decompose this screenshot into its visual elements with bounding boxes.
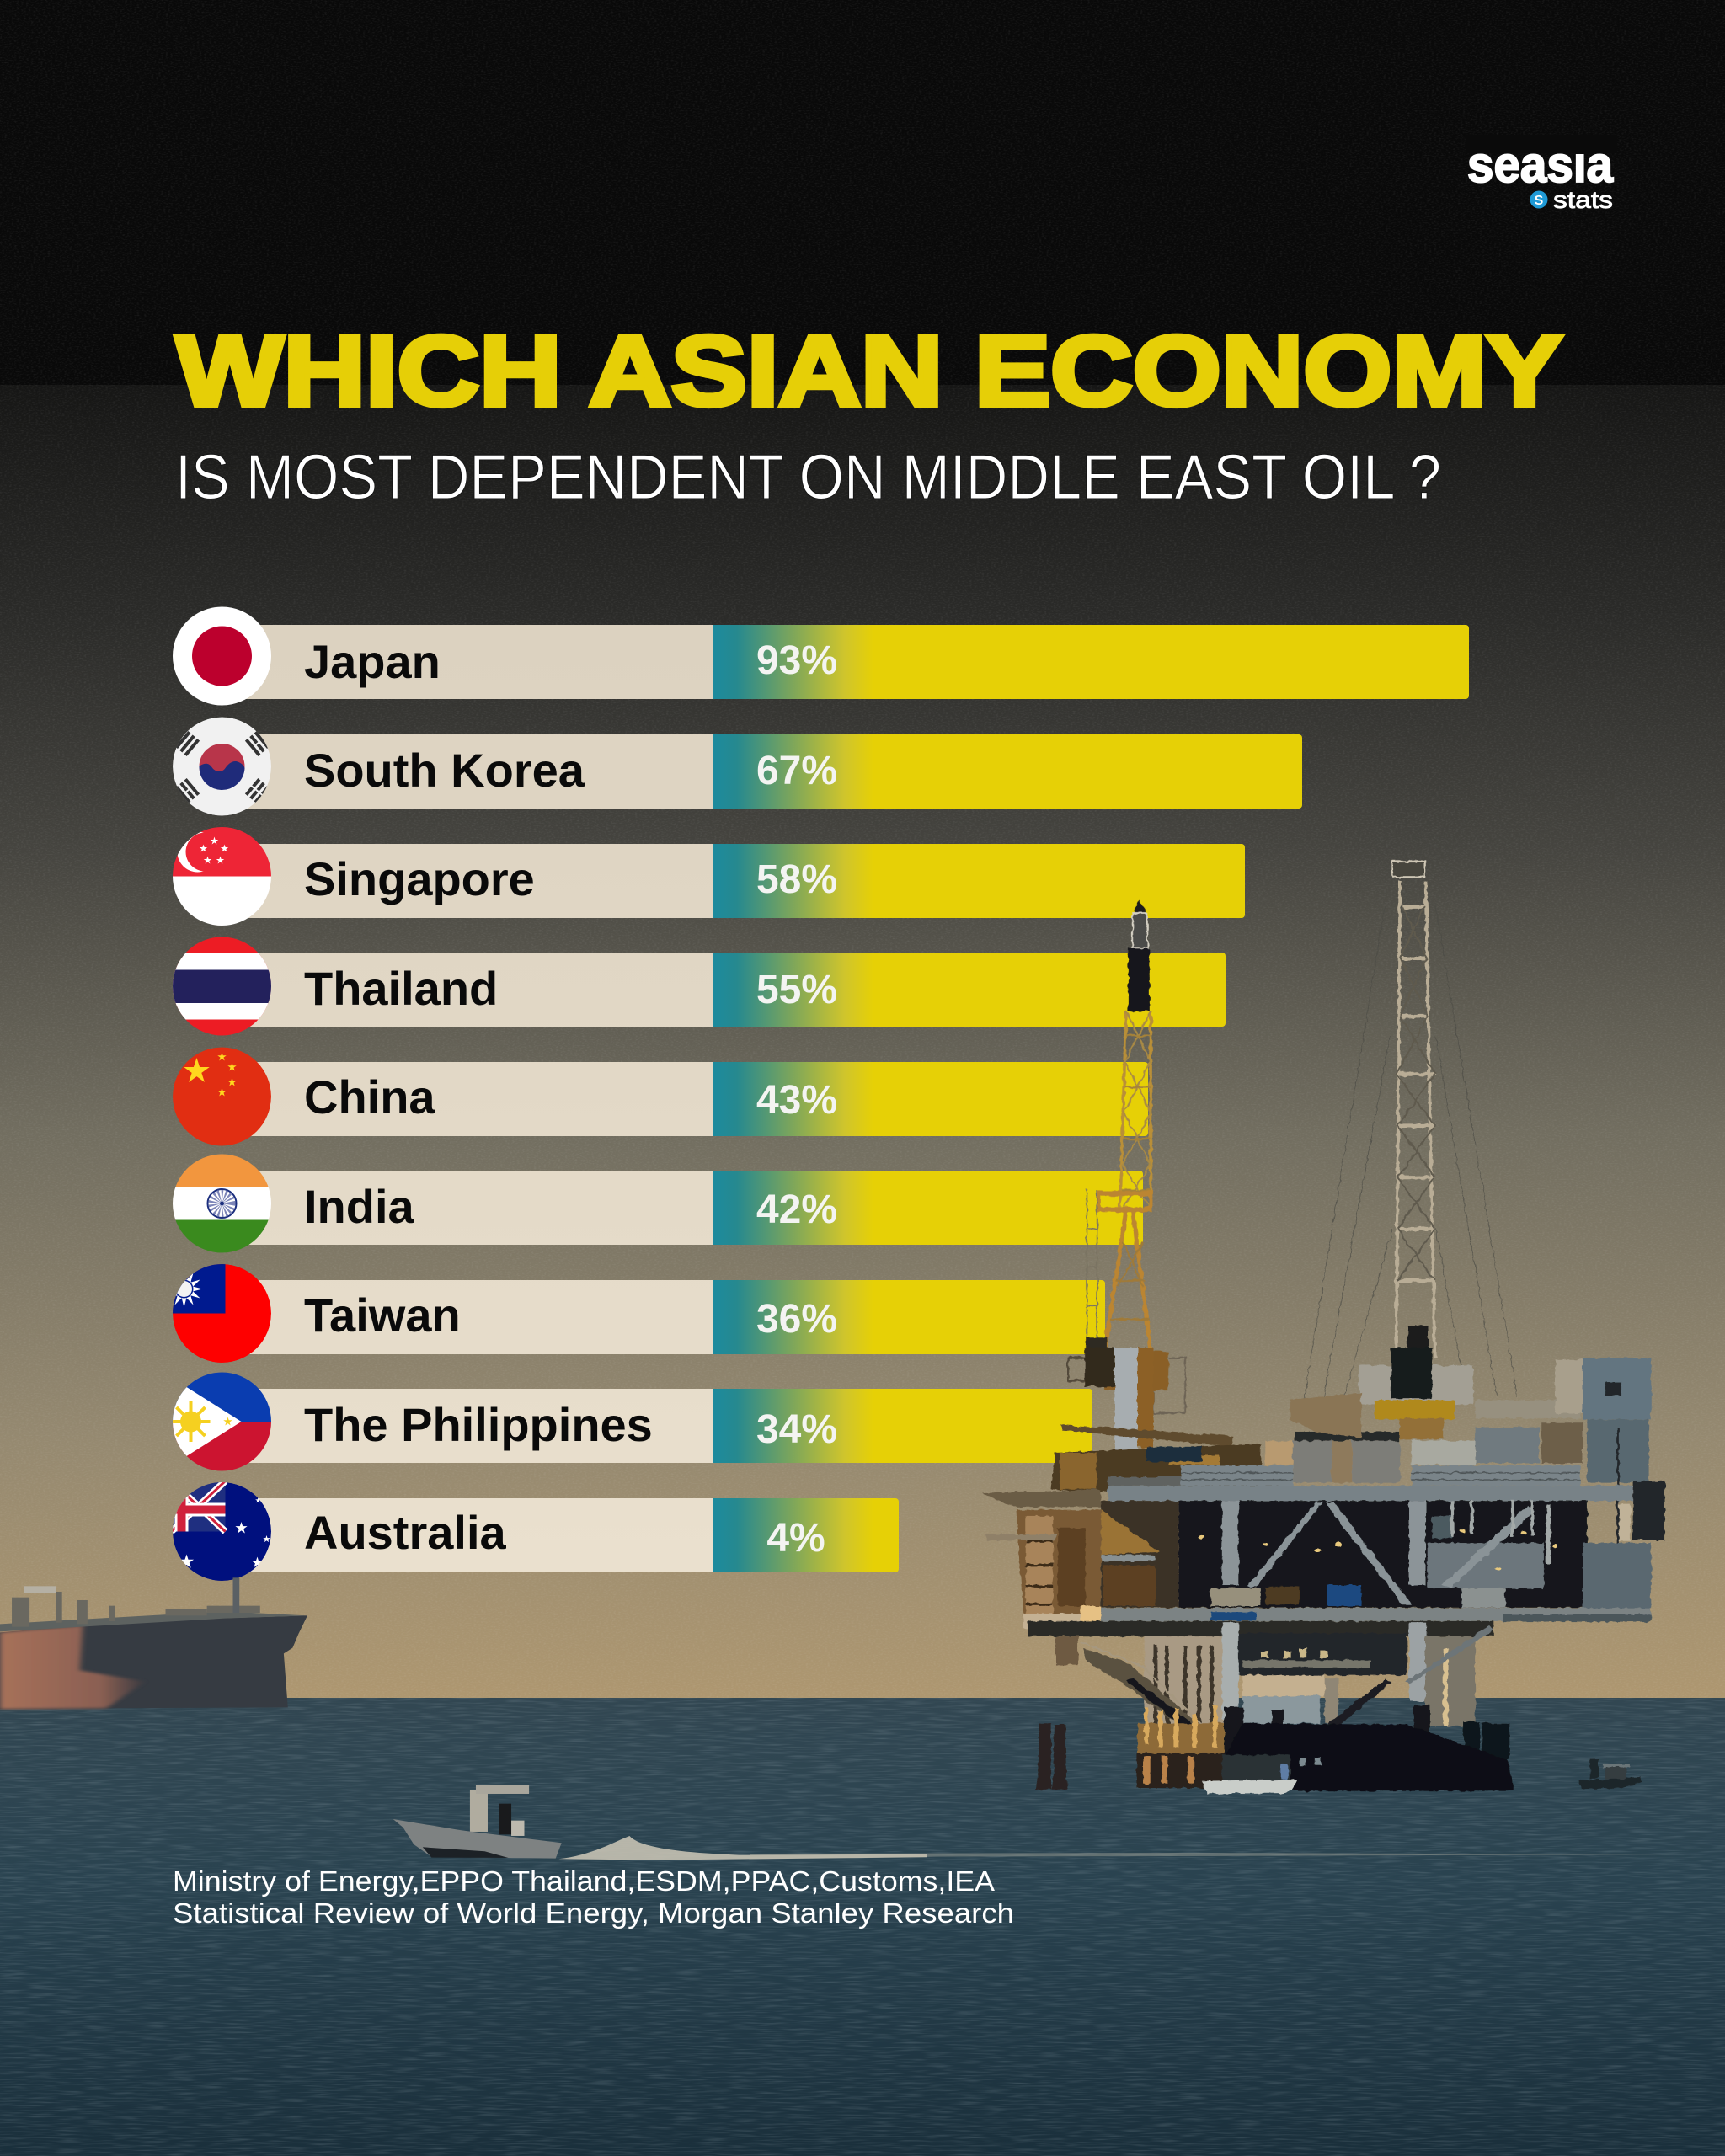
source note [173, 1865, 1014, 1929]
logo: seasia stats: stats [1553, 187, 1613, 214]
logo: seasia stats: S [1535, 194, 1544, 208]
subtitle: IS MOST DEPENDENT ON MIDDLE EAST OIL ? [175, 441, 1441, 512]
icon: flag of the Philippines [172, 1371, 273, 1472]
icon: flag of China [173, 1048, 271, 1145]
row: Singapore 58%: 58% [756, 857, 837, 902]
background: dusk sky [0, 385, 1725, 1701]
row: India 42%: 42% [756, 1187, 837, 1232]
icon: flag of Singapore [172, 825, 273, 926]
oil rig platform [982, 862, 1665, 1794]
row: The Philippines 34%: The Philippines [304, 1398, 653, 1451]
logo: seasia stats [1466, 135, 1617, 214]
row: Thailand 55% [222, 953, 1226, 1027]
icon: flag of Taiwan [165, 1263, 271, 1363]
row: Thailand 55%: 55% [756, 968, 837, 1012]
row: China 43% [222, 1062, 1148, 1136]
row: Singapore 58%: Singapore [304, 852, 535, 905]
tanker ship on the left [0, 1577, 307, 1709]
bar chart: oil dependence by country [222, 625, 1469, 1572]
row: South Korea 67%: South Korea [304, 744, 585, 797]
title: WHICH ASIAN ECONOMY [176, 316, 1562, 427]
sea ripples [0, 1698, 1725, 2156]
wake line across the sea [750, 1853, 1685, 1857]
mooring dolphins [1035, 1723, 1068, 1790]
speedboat with wake [393, 1785, 927, 1860]
row: Australia 4%: Australia [304, 1506, 506, 1559]
background: dark top band [0, 0, 1725, 385]
row: Taiwan 36%: 36% [756, 1297, 837, 1342]
platform legs and base [1028, 1621, 1514, 1791]
row: Japan 93% [222, 625, 1469, 699]
row: Singapore 58% [222, 844, 1245, 918]
logo: seasia stats: seasia [1467, 136, 1614, 193]
drilling derrick [1303, 862, 1517, 1403]
icon: flag of India [172, 1153, 273, 1255]
support boat at platform [1201, 1755, 1296, 1794]
small boat right of platform [1578, 1759, 1642, 1789]
sky grain texture [0, 0, 1725, 1698]
row: South Korea 67% [222, 734, 1302, 808]
background: sea [0, 1698, 1725, 2156]
upper deck equipment [1051, 1348, 1665, 1547]
row: Thailand 55%: Thailand [304, 962, 498, 1015]
row: Japan 93%: Japan [304, 635, 441, 688]
icon: flag of Thailand [172, 936, 273, 1037]
icon: flag of Japan [173, 606, 271, 706]
main deck structure [982, 1465, 1651, 1629]
icon: flag of South Korea [173, 718, 271, 815]
row: Japan 93%: 93% [756, 638, 837, 683]
row: The Philippines 34% [222, 1389, 1092, 1463]
row: India 42%: India [304, 1180, 415, 1233]
row: China 43%: 43% [756, 1078, 837, 1123]
source note: Ministry of Energy,EPPO Thailand,ESDM,PPAC,Customs,IEA [173, 1865, 995, 1897]
row: South Korea 67%: 67% [756, 749, 837, 793]
row: Taiwan 36% [222, 1280, 1105, 1354]
row: The Philippines 34%: 34% [756, 1407, 837, 1452]
icon: flag of Australia [172, 1481, 271, 1581]
row: Australia 4%: 4% [766, 1516, 825, 1561]
source note: Statistical Review of World Energy, Morgan Stanley Research [173, 1897, 1014, 1929]
row: Taiwan 36%: Taiwan [304, 1289, 461, 1342]
row: Australia 4% [222, 1498, 899, 1572]
row: India 42% [222, 1171, 1143, 1245]
row: China 43%: China [304, 1070, 435, 1123]
crane boom [1068, 899, 1185, 1448]
